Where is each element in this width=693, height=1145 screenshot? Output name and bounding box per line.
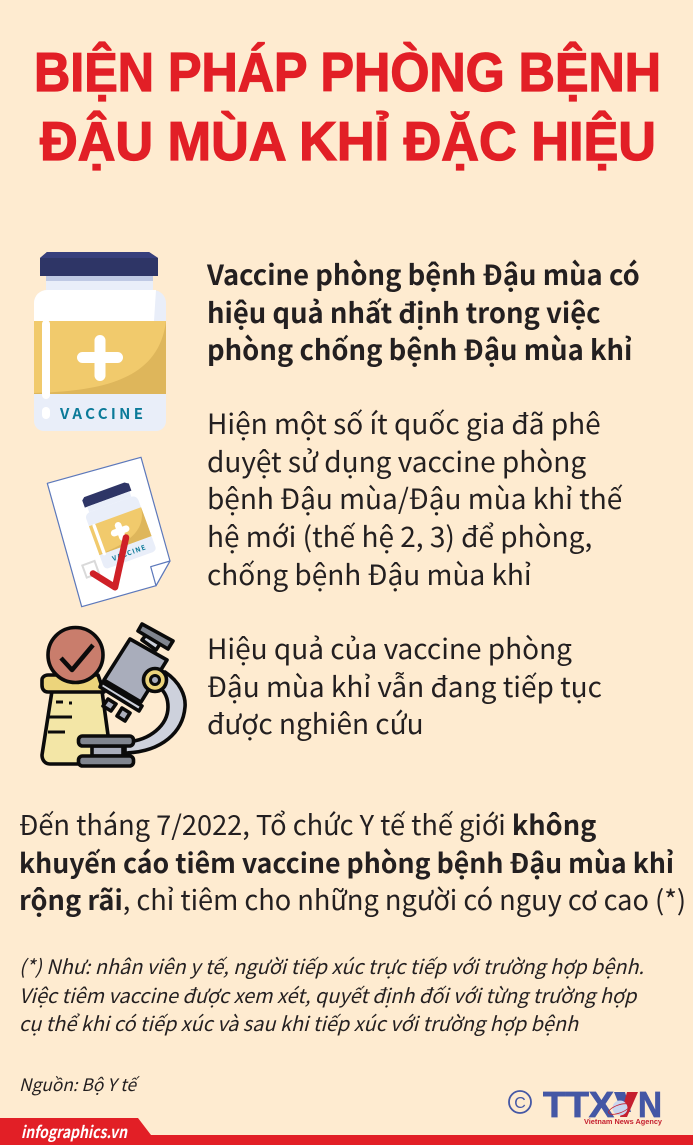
text: approved new generation vaccines: duyệt sử dụng vaccine phòng bbox=[207, 441, 586, 481]
text: approved new generation vaccines: chống bệnh Đậu mùa khỉ bbox=[207, 554, 532, 594]
icon: vaccine document with check mark: VACCINE bbox=[110, 542, 147, 563]
text: efficacy still being researched: được nghiên cứu bbox=[207, 703, 424, 743]
text: approved new generation vaccines: hệ mới (thế hệ 2, 3) để phòng, bbox=[207, 516, 592, 556]
title bbox=[34, 41, 661, 172]
footer bar bbox=[0, 1118, 693, 1145]
footnote: (*) Như: nhân viên y tế, người tiếp xúc trực tiếp với trường hợp bệnh. bbox=[19, 951, 644, 980]
logo: TTXVN: N bbox=[638, 1084, 662, 1125]
text: approved new generation vaccines: Hiện một số ít quốc gia đã phê bbox=[207, 403, 601, 443]
text: approved new generation vaccines bbox=[207, 403, 622, 594]
heading text: vaccine effectiveness: hiệu quả nhất định trong việc bbox=[207, 291, 601, 331]
text: WHO recommendation: khuyến cáo tiêm vaccine phòng bệnh Đậu mùa khỉ bbox=[19, 842, 674, 881]
logo: TTXVN: Vietnam News Agency bbox=[584, 1117, 663, 1126]
footer site label: infographics.vn bbox=[21, 1119, 128, 1143]
icon: vaccine bottle bbox=[34, 252, 166, 431]
source: Nguồn: Bộ Y tế bbox=[19, 1071, 136, 1096]
footnote bbox=[19, 951, 644, 1037]
icon: flask and microscope bbox=[40, 622, 187, 768]
heading text: vaccine effectiveness: Vaccine phòng bệnh Đậu mùa có bbox=[207, 253, 640, 293]
icon: vaccine bottle: VACCINE bbox=[59, 403, 143, 424]
text: efficacy still being researched bbox=[207, 628, 602, 743]
icon: vaccine document with check mark bbox=[46, 456, 171, 608]
footnote: Việc tiêm vaccine được xem xét, quyết định đối với từng trường hợp bbox=[19, 980, 636, 1008]
text: WHO recommendation: Đến tháng 7/2022, Tổ chức Y tế thế giới không bbox=[19, 803, 596, 843]
text: efficacy still being researched: Hiệu quả của vaccine phòng bbox=[207, 628, 572, 668]
logo: TTXVN: C bbox=[514, 1095, 526, 1112]
heading text: vaccine effectiveness: phòng chống bệnh Đậu mùa khỉ bbox=[207, 328, 632, 368]
heading text: vaccine effectiveness bbox=[206, 253, 640, 368]
logo: TTXVN bbox=[508, 1084, 663, 1126]
text: WHO recommendation bbox=[19, 803, 686, 918]
text: approved new generation vaccines: bệnh Đậu mùa/Đậu mùa khỉ thế bbox=[207, 478, 622, 518]
footnote: cụ thể khi có tiếp xúc và sau khi tiếp xúc với trường hợp bệnh bbox=[19, 1008, 578, 1037]
logo: TTXVN: TTX bbox=[543, 1084, 614, 1125]
text: WHO recommendation: rộng rãi, chỉ tiêm cho những người có nguy cơ cao (*) bbox=[19, 878, 686, 918]
text: efficacy still being researched: Đậu mùa khỉ vẫn đang tiếp tục bbox=[207, 666, 602, 706]
title: ĐẬU MÙA KHỈ ĐẶC HIỆU bbox=[40, 110, 656, 172]
